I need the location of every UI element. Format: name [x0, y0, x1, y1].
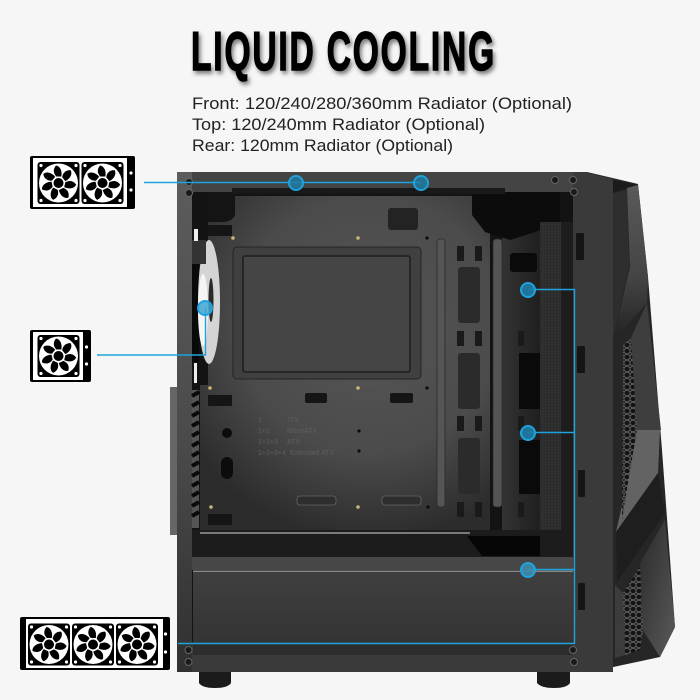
interior: [192, 192, 573, 644]
tray mounting labels: ITX: [288, 417, 299, 424]
radiator support text: Top: 120/240mm Radiator (Optional): [192, 115, 485, 134]
tray mounting labels: 1+2+3: [258, 439, 278, 446]
left frame: [177, 172, 192, 672]
front mesh filter: [540, 222, 561, 557]
frame corners and screws: [185, 176, 578, 666]
radiator support text: Rear: 120mm Radiator (Optional): [192, 136, 453, 155]
tray corner shadow: [205, 192, 235, 222]
inner channel: [561, 222, 573, 557]
tray mounting labels: [258, 417, 335, 457]
icon: triple-fan radiator: [20, 617, 170, 670]
motherboard tray: [200, 196, 490, 530]
side lip: [170, 387, 178, 535]
tray mounting labels: 1: [258, 417, 262, 424]
case feet: [199, 670, 570, 688]
radiator support text: [192, 94, 572, 155]
front panel: [587, 172, 675, 672]
interior fan: [192, 240, 220, 364]
raised strips: [437, 239, 502, 507]
top mesh strip: [232, 188, 505, 194]
right tray section: [502, 205, 540, 535]
icon: dual-fan radiator: [30, 156, 135, 209]
lower front mesh: [623, 567, 643, 655]
callout: top radiator line: [144, 176, 428, 190]
radiator support text: Front: 120/240/280/360mm Radiator (Optional): [192, 94, 572, 113]
tray mounting labels: Extended ATX: [290, 450, 335, 457]
tray standoffs: [208, 236, 360, 509]
title: LIQUID COOLING: [191, 20, 496, 82]
tray holes: [221, 236, 430, 509]
callout: front radiator lines: [178, 283, 574, 644]
tray clips: [208, 225, 413, 525]
right black openings: [510, 253, 540, 494]
tray oval cutouts: [297, 496, 421, 505]
motherboard cutout: [233, 247, 421, 379]
PC case: [170, 172, 675, 688]
chassis frame: [177, 172, 588, 672]
cable bundle: [472, 192, 560, 240]
PSU shroud: [192, 530, 573, 655]
tray mounting labels: MicroATX: [287, 428, 318, 435]
tray mounting labels: ATX: [287, 439, 300, 446]
rear slots: [457, 246, 524, 517]
small cutout: [388, 208, 418, 230]
white cable openings: [194, 229, 198, 383]
tray mounting labels: 1+2: [258, 428, 270, 435]
top frame: [192, 172, 573, 192]
left cable pass-through: [192, 390, 199, 528]
right frame notches: [576, 233, 585, 610]
tray mounting labels: 1+2+3+4: [258, 450, 286, 457]
icon: single-fan radiator: [30, 330, 91, 382]
upper front mesh: [622, 338, 637, 520]
callout: rear radiator line: [97, 301, 212, 355]
